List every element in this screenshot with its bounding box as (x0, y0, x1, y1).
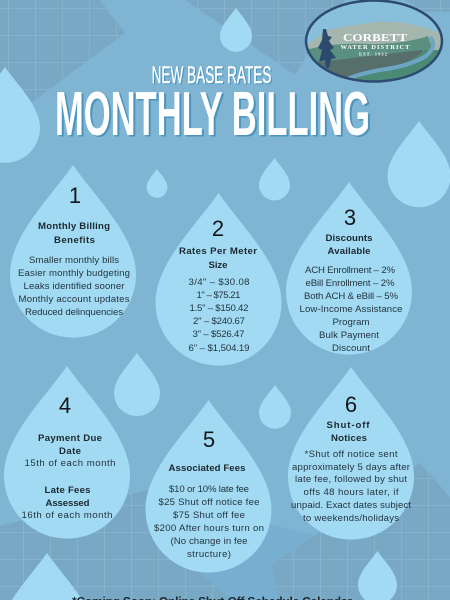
late fees text: Late Fees (44, 485, 90, 496)
panel: 5 associated fees (146, 400, 272, 573)
benefits list: Smaller monthly bills (29, 255, 119, 266)
discounts list: Bulk Payment (319, 330, 379, 341)
heading: discounts: Available (328, 246, 370, 257)
discounts list: Low-Income Assistance (300, 304, 402, 315)
heading: rates: Rates Per Meter (179, 246, 257, 257)
number 1: 1 (69, 183, 81, 208)
discounts list: eBill Enrollment – 2% (306, 278, 395, 289)
panel: 2 rates per meter size (156, 193, 282, 366)
fees list: $10 or 10% late fee (169, 484, 249, 495)
shut-off details: *Shut off notice sent (304, 449, 398, 460)
late fees text (22, 485, 112, 521)
fees list: (No change in fee (170, 536, 248, 547)
title: Monthly Billing: MONTHLY BILLING (57, 81, 372, 150)
background grid: top right (405, 0, 450, 12)
fees list: $200 After hours turn on (154, 523, 264, 534)
fees list: $25 Shut off notice fee (158, 497, 260, 508)
discounts list: Program (332, 317, 370, 328)
late fees text: Assessed (46, 498, 90, 509)
number 4: 4 (59, 393, 71, 418)
heading: shut-off: Notices (331, 433, 367, 444)
shut-off details: offs 48 hours later, if (304, 487, 399, 498)
drop shape 2 (156, 193, 282, 366)
drop shape 5 (146, 400, 272, 573)
rates list (188, 277, 250, 354)
benefits list: Monthly account updates (18, 294, 130, 305)
payment due text: 15th of each month (24, 458, 116, 469)
late fees text: 16th of each month (22, 510, 112, 521)
number 3: 3 (344, 205, 356, 230)
heading: rates: Size (208, 260, 228, 271)
background darker wedge (200, 520, 315, 600)
background grid: top centre (185, 0, 345, 75)
discounts list (300, 265, 402, 354)
number 2: 2 (212, 216, 224, 241)
panel: 3 discounts available (286, 182, 412, 355)
drop shape 4 (4, 366, 130, 539)
heading: fees: Associated Fees (168, 463, 246, 474)
rates list: 1.5" – $150.42 (190, 303, 248, 314)
logo: Corbett Water District: WATER DISTRICT (340, 44, 410, 51)
discounts list: Both ACH & eBill – 5% (304, 291, 398, 302)
fees list (154, 484, 264, 560)
drop shape 3 (286, 182, 412, 355)
background grid: bottom left (0, 490, 232, 600)
panel: 6 shut-off notices (288, 367, 414, 540)
benefits list: Leaks identified sooner (24, 281, 125, 292)
subtitle: New Base Rates: NEW BASE RATES (152, 62, 271, 89)
discounts list: ACH Enrollment – 2% (305, 265, 395, 276)
fees list: structure) (187, 549, 231, 560)
rates list: 1" – $75.21 (196, 290, 240, 301)
background grid: bottom right (272, 463, 450, 600)
payment due text: Date (59, 446, 81, 457)
logo: Corbett Water District: EST. 1932 (359, 52, 388, 56)
shut-off details: late fee, followed by shut (295, 474, 407, 485)
rates list: 3/4" – $30.08 (188, 277, 250, 288)
payment due text (24, 433, 116, 469)
heading: rates (179, 246, 257, 271)
rates list: 2" – $240.67 (193, 316, 245, 327)
shut-off details: unpaid. Exact dates subject (291, 500, 411, 511)
benefits list (18, 255, 130, 318)
drop shape 6 (288, 367, 414, 540)
heading: discounts (326, 233, 372, 257)
heading: benefits: Monthly Billing (38, 221, 110, 232)
fees list: $75 Shut off fee (173, 510, 245, 521)
heading: shut-off: Shut-off (326, 420, 370, 431)
subtitle: New Base Rates: NEW BASE RATES (153, 63, 273, 90)
benefits list: Reduced delinquencies (25, 307, 123, 318)
panel: 4 payment due date (4, 366, 130, 539)
rates list: 6" – $1,504.19 (188, 343, 250, 354)
logo: Corbett Water District (305, 0, 445, 85)
panel: 1 monthly billing benefits (10, 165, 136, 338)
number 6: 6 (345, 392, 357, 417)
shut-off details: approximately 5 days after (292, 462, 411, 473)
title: Monthly Billing: MONTHLY BILLING (55, 79, 370, 149)
benefits list: Easier monthly budgeting (18, 268, 130, 279)
number 5: 5 (203, 427, 215, 452)
drop shape 1 (10, 165, 136, 338)
payment due text: Payment Due (38, 433, 102, 444)
rates list: 3" – $526.47 (192, 329, 244, 340)
heading: benefits: Benefits (54, 235, 95, 246)
background grid: top left (0, 0, 125, 125)
discounts list: Discount (332, 343, 370, 354)
shut-off details: to weekends/holidays (303, 513, 399, 524)
shut-off details (291, 449, 411, 524)
heading: benefits (38, 221, 110, 246)
logo: Corbett Water District: CORBETT (343, 31, 407, 44)
heading: discounts: Discounts (326, 233, 372, 244)
heading: shut-off (326, 420, 370, 444)
